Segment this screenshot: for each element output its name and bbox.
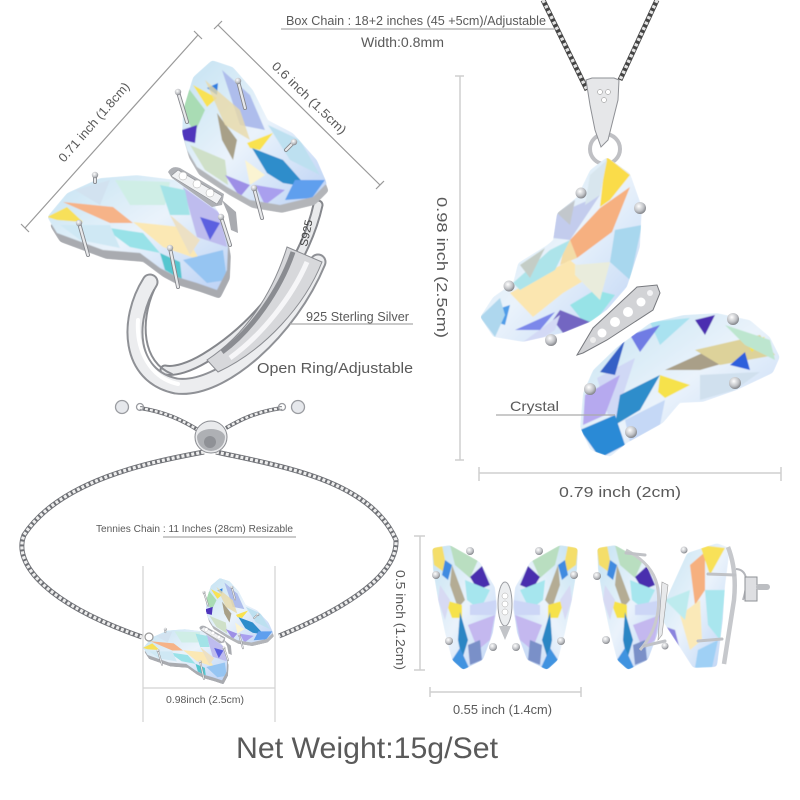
end caps xyxy=(116,400,304,414)
label: chain width: Width:0.8mm xyxy=(361,35,444,50)
label: pendant height: 0.98 inch (2.5cm) xyxy=(433,197,450,338)
ring S925 stamp: S925 xyxy=(298,219,316,248)
ring slider rail xyxy=(207,247,322,372)
slider bead xyxy=(195,421,227,453)
label: pendant width: 0.79 inch (2cm) xyxy=(559,484,681,501)
label: bracelet butterfly width: 0.98inch (2.5cm) xyxy=(166,694,244,706)
bracelet butterfly xyxy=(143,578,274,684)
chain xyxy=(22,408,396,637)
pendant prongs xyxy=(504,188,741,438)
bracelet xyxy=(22,400,396,684)
pendant body with stones xyxy=(577,285,660,355)
necklace pendant xyxy=(480,0,780,458)
label: ring width: 0.6 inch (1.5cm) xyxy=(269,59,349,137)
net weight heading: Net Weight:15g/Set xyxy=(236,732,499,765)
label: box chain length: Box Chain : 18+2 inches (45 +5cm)/Adjustable xyxy=(286,14,546,28)
lower wing xyxy=(580,313,780,457)
label: earring height: 0.5 inch (1.2cm) xyxy=(393,570,407,670)
label: tennis chain: Tennies Chain : 11 Inches (28cm) Resizable xyxy=(96,524,293,535)
bail xyxy=(590,134,620,164)
label: ring length: 0.71 inch (1.8cm) xyxy=(56,80,133,165)
label: crystal: Crystal xyxy=(510,398,559,414)
box chain xyxy=(543,0,657,90)
front stud xyxy=(432,545,578,672)
label: sterling silver: 925 Sterling Silver xyxy=(306,309,410,324)
label: earring width: 0.55 inch (1.4cm) xyxy=(453,702,552,717)
side stud xyxy=(593,543,770,672)
upper wing xyxy=(480,157,780,458)
earrings xyxy=(432,543,770,672)
ring with butterfly xyxy=(47,60,329,386)
label: open ring: Open Ring/Adjustable xyxy=(257,360,413,377)
ring band xyxy=(135,205,318,386)
